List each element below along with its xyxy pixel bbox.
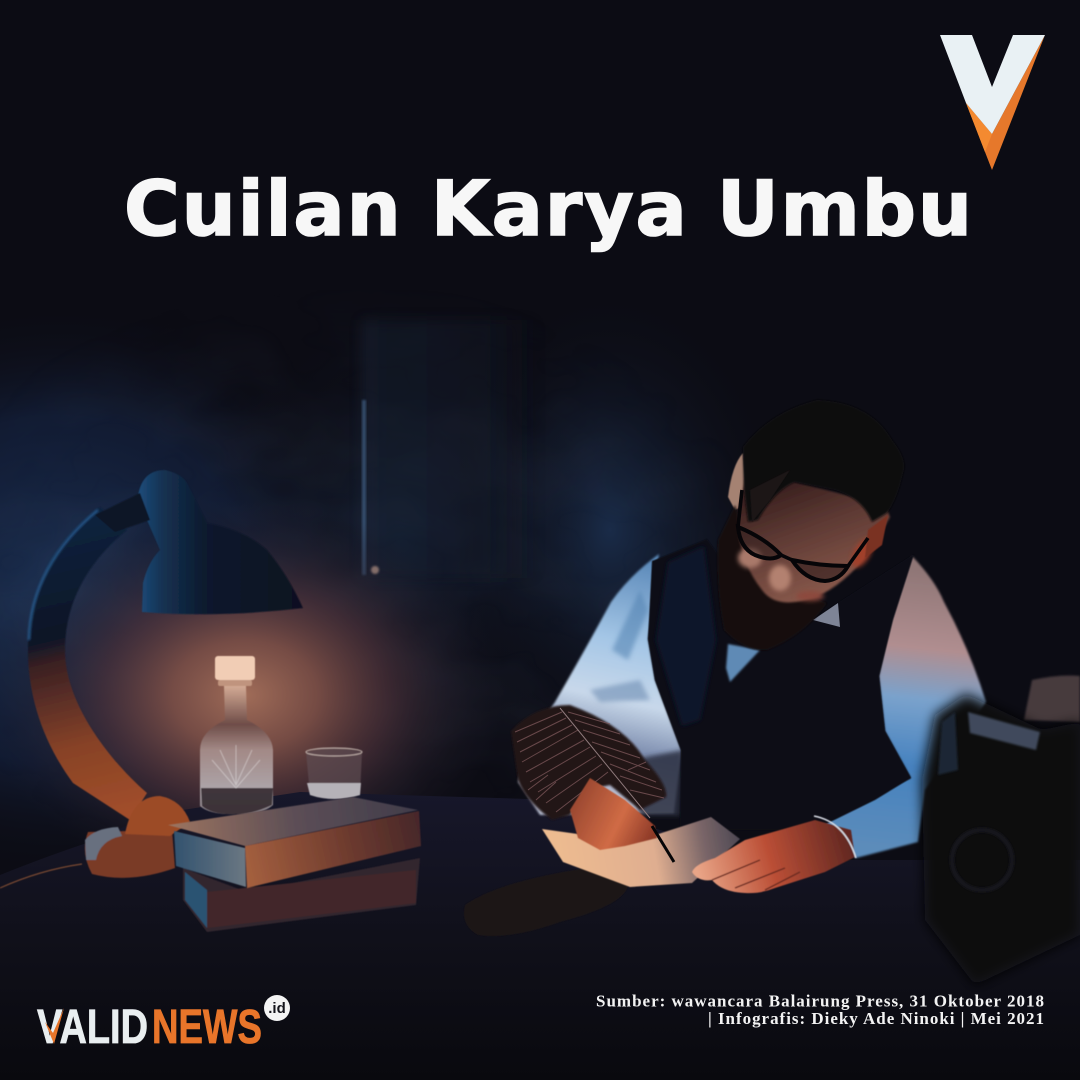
face	[738, 470, 890, 602]
lamp light glow on wall	[0, 500, 505, 890]
manuscript paper	[542, 817, 740, 887]
source credit: | Infografis: Dieky Ade Ninoki | Mei 2021	[708, 1009, 1044, 1028]
logo: ValidNews.id: VALID	[37, 1001, 148, 1054]
logo: ValidNews.id	[37, 995, 290, 1054]
glasses	[738, 490, 868, 581]
stacked books	[168, 797, 421, 932]
lamp base	[85, 830, 175, 878]
drinking glass	[306, 748, 362, 799]
table	[0, 792, 1080, 1080]
lower book	[183, 858, 420, 932]
writing hand	[570, 778, 657, 850]
icon: V logo top right	[940, 35, 1045, 170]
logo: ValidNews.id: NEWS	[152, 1001, 262, 1054]
hair	[743, 400, 904, 522]
lamp arm	[28, 507, 147, 820]
window light patch on wall	[362, 320, 540, 578]
man writing	[511, 400, 986, 893]
leather pouch on table	[464, 866, 628, 936]
pen	[652, 826, 674, 862]
ear left	[728, 453, 746, 510]
beard	[718, 505, 827, 650]
left sleeve folds and shadow	[590, 590, 683, 816]
upper book	[168, 797, 421, 888]
source credit	[596, 992, 1044, 1028]
lamp head and shade	[138, 470, 303, 614]
desk lamp	[0, 470, 303, 888]
glass carafe	[200, 656, 273, 814]
lamp cord	[0, 864, 82, 888]
vest	[648, 539, 914, 830]
typewriter	[922, 676, 1080, 985]
feather quill	[511, 705, 666, 820]
right sleeve	[814, 556, 986, 858]
right hand	[692, 816, 856, 893]
photo background: dark room wall with blue haze	[0, 358, 726, 820]
shirt front	[726, 644, 760, 682]
source credit: Sumber: wawancara Balairung Press, 31 Oktober 2018	[596, 992, 1044, 1010]
face highlights	[738, 535, 877, 601]
id badge	[264, 995, 290, 1021]
left sleeve	[518, 554, 681, 815]
ear right	[865, 515, 888, 558]
title: Cuilan Karya Umbu	[124, 164, 972, 253]
id badge: .id	[268, 1000, 286, 1017]
shirt cuff	[814, 816, 856, 858]
